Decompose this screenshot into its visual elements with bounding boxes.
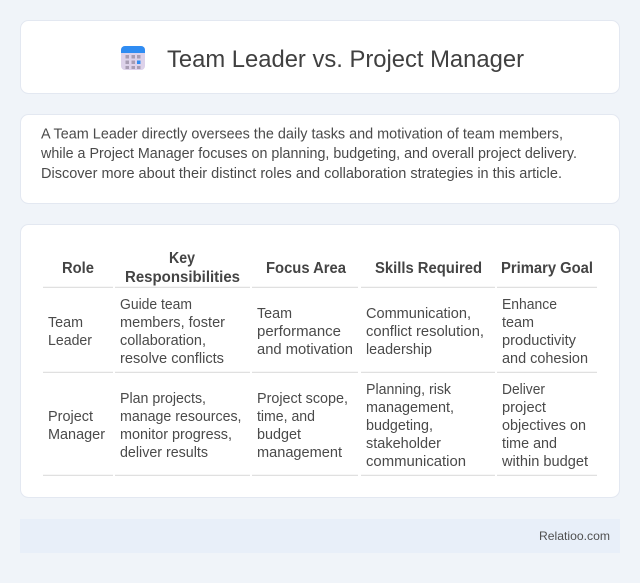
table row: Project Manager: within budget [501, 454, 588, 470]
table row: Project Manager: management [257, 445, 342, 461]
table row: Team Leader: Communication, [366, 306, 471, 322]
table row: Team Leader: performance [257, 324, 341, 340]
table row: Project Manager: Project scope, [257, 391, 348, 407]
table row: Team Leader: collaboration, [120, 333, 206, 349]
table row: Team Leader: resolve conflicts [120, 351, 224, 367]
table row: Team Leader: and cohesion [502, 351, 588, 367]
table header row: Responsibilities [125, 269, 240, 286]
footer credit: Relatioo.com [539, 529, 610, 543]
icon: calendar [121, 46, 145, 70]
table row: Project Manager: time, and [257, 409, 315, 425]
table header row: Key [169, 250, 195, 267]
text block: introduction [40, 126, 577, 182]
text block: introduction: while a Project Manager focuses on planning, budgeting, and overall project delivery. [40, 146, 577, 162]
panel: comparison table [20, 224, 620, 498]
table row: Team Leader: Enhance [502, 297, 557, 313]
table row: Project Manager: deliver results [120, 445, 208, 461]
table header row [62, 250, 593, 286]
table header row: Primary Goal [501, 260, 593, 277]
table row: Project Manager: stakeholder [366, 436, 441, 452]
table row: Team Leader: team [502, 315, 534, 331]
table row: Team Leader: Team [48, 315, 83, 331]
table row: Team Leader: productivity [502, 333, 577, 349]
table row: Team Leader: and motivation [257, 342, 353, 358]
table row: Project Manager: Deliver [502, 382, 545, 398]
table row: Project Manager: Planning, risk [366, 382, 452, 398]
table row: Project Manager: objectives on [502, 418, 586, 434]
table row: Project Manager: time and [502, 436, 557, 452]
table row: Team Leader: members, foster [120, 315, 225, 331]
table row: Team Leader: Team [257, 306, 292, 322]
text block: introduction: Discover more about their distinct roles and collaboration strategies in this article. [41, 166, 562, 182]
table row: Project Manager: communication [366, 454, 466, 470]
table row: Project Manager: Plan projects, [120, 391, 206, 407]
table row: Project Manager: management, [366, 400, 454, 416]
table row: Project Manager: Project [48, 409, 93, 425]
table row: Project Manager: budget [257, 427, 301, 443]
table header row: Role [62, 260, 94, 277]
table row: Team Leader: Leader [48, 333, 92, 349]
table row: Team Leader [48, 297, 588, 367]
table row: Project Manager: budgeting, [366, 418, 433, 434]
table row: Team Leader: conflict resolution, [366, 324, 484, 340]
panel: introduction [20, 114, 620, 204]
table row: Project Manager: manage resources, [120, 409, 242, 425]
table header row: Focus Area [266, 260, 346, 277]
table row: Team Leader: Guide team [120, 297, 192, 313]
table row: Team Leader: leadership [366, 342, 432, 358]
table header row: Skills Required [375, 260, 482, 277]
text block: introduction: A Team Leader directly oversees the daily tasks and motivation of team members, [41, 126, 563, 142]
table row: Project Manager: Manager [48, 427, 105, 443]
footer bar [20, 519, 620, 553]
table row: Project Manager [48, 382, 588, 470]
title: Team Leader vs. Project Manager [167, 46, 524, 73]
table row: Project Manager: monitor progress, [120, 427, 232, 443]
table row: Project Manager: project [502, 400, 546, 416]
panel: header [20, 20, 620, 94]
